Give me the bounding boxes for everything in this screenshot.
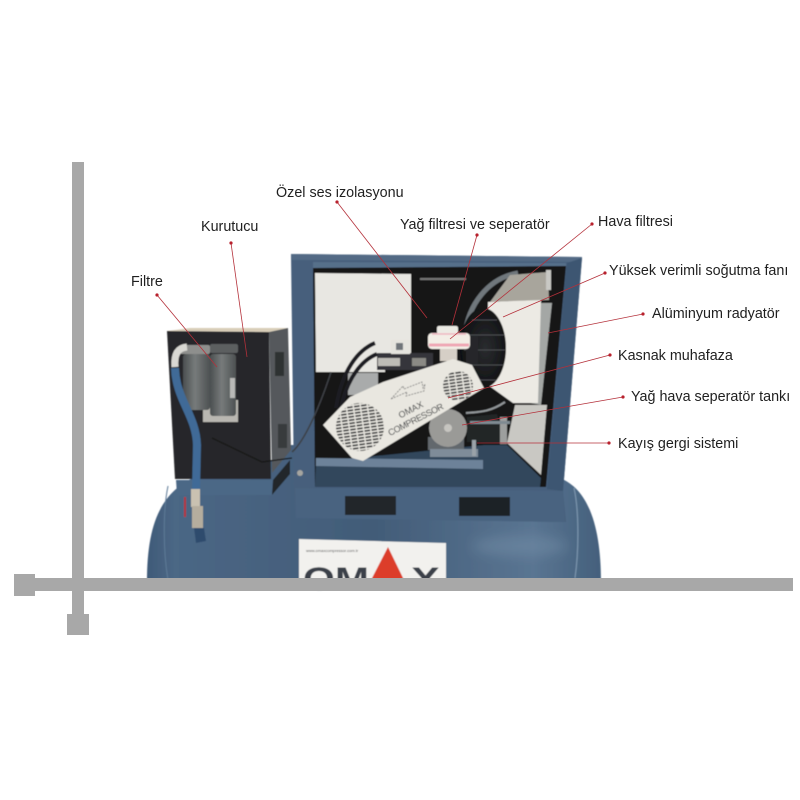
label: Alüminyum radyatör [548, 306, 780, 333]
label: Yüksek verimli soğutma fanı: Yüksek verimli soğutma fanı [609, 263, 788, 279]
tank label [299, 539, 446, 597]
label: Alüminyum radyatör: Alüminyum radyatör [652, 306, 780, 322]
tank label: www.omaxcompressor.com.tr [306, 548, 359, 553]
oil filter [428, 326, 470, 361]
radiator [488, 270, 552, 405]
floor [315, 445, 541, 487]
label: Hava filtresi [450, 214, 673, 339]
tank label: X [411, 561, 441, 597]
pulley assembly [428, 402, 510, 457]
vent large [336, 403, 384, 451]
label: Kayış gergi sistemi: Kayış gergi sistemi [618, 436, 738, 452]
cabinet interior [313, 266, 566, 487]
label: Özel ses izolasyonu: Özel ses izolasyonu [276, 183, 404, 201]
dryer [167, 328, 292, 495]
compressor photo [147, 254, 601, 597]
label: Kurutucu [201, 219, 258, 357]
label: Kurutucu: Kurutucu [201, 219, 258, 235]
vent small [443, 371, 473, 401]
cabinet frame [291, 254, 582, 522]
belt guard [323, 359, 484, 461]
label: Hava filtresi: Hava filtresi [598, 214, 673, 230]
fan [460, 308, 506, 388]
label: Yağ filtresi ve seperatör: Yağ filtresi ve seperatör [400, 217, 550, 233]
label: Özel ses izolasyonu [276, 183, 427, 318]
label: Kayış gergi sistemi [477, 436, 738, 452]
label: Filtre: Filtre [131, 274, 163, 290]
hose [175, 347, 206, 543]
air tank [147, 445, 601, 582]
tank label: OM [303, 561, 369, 597]
label: Kasnak muhafaza [448, 348, 733, 398]
filter units [180, 344, 238, 422]
side wall [507, 405, 547, 475]
frame bars [14, 162, 793, 635]
arrow logo [391, 382, 425, 399]
label: Yağ filtresi ve seperatör [400, 217, 550, 325]
air hose [465, 273, 518, 335]
guard text: COMPRESSOR [386, 401, 446, 438]
base slots [345, 496, 510, 516]
insulation panel [315, 273, 411, 372]
label: Yüksek verimli soğutma fanı [503, 263, 788, 317]
guard text: OMAX [397, 399, 425, 420]
label: Yağ hava seperatör tankı [462, 389, 790, 425]
motor and wiring [292, 340, 433, 476]
label: Kasnak muhafaza: Kasnak muhafaza [618, 348, 733, 364]
label: Yağ hava seperatör tankı: Yağ hava seperatör tankı [631, 389, 790, 405]
base plate [316, 458, 483, 469]
label: Filtre [131, 274, 217, 367]
